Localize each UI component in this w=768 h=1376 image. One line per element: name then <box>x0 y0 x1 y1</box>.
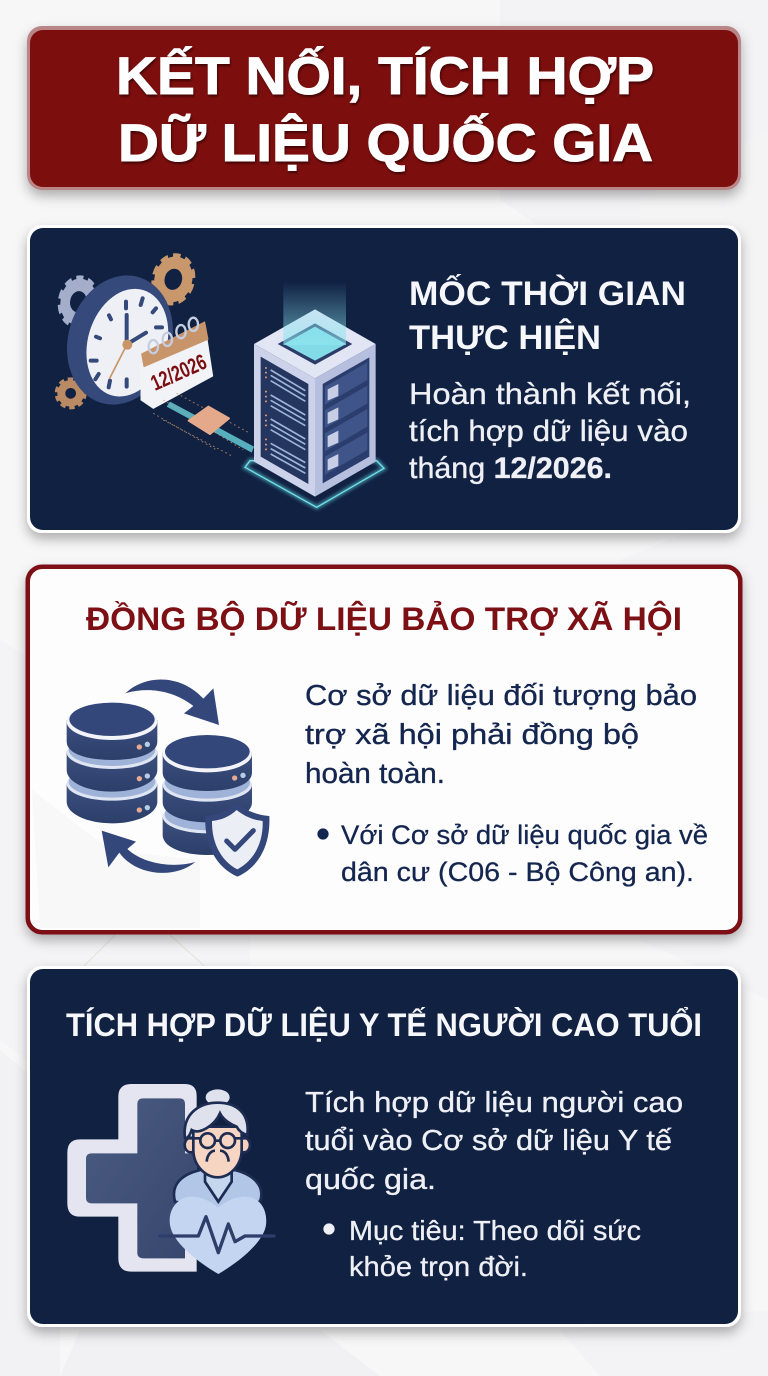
body text: timeline: tháng 12/2026. <box>409 452 612 485</box>
heart with pulse <box>160 1197 274 1274</box>
body text: social protection: trợ xã hội phải đồng bộ <box>305 719 639 751</box>
top arrow <box>125 680 219 725</box>
elderly woman <box>174 1089 261 1210</box>
icon: gears <box>56 252 198 407</box>
icon: clock <box>51 262 189 418</box>
body text: social protection: Cơ sở dữ liệu đối tượng bảo <box>305 680 697 712</box>
icon: shield <box>205 803 269 877</box>
bullet: social protection <box>318 820 708 887</box>
icon: calendar <box>141 318 213 408</box>
icon: syncing databases with shield <box>67 680 269 877</box>
body text: timeline <box>409 378 691 485</box>
body text: social protection: hoàn toàn. <box>305 758 445 790</box>
body text: social protection <box>305 680 697 790</box>
bullet: elderly health: khỏe trọn đời. <box>349 1251 528 1282</box>
illustration: clock, calendar and server <box>51 252 384 507</box>
panel: timeline <box>27 225 741 533</box>
icon: server <box>245 282 384 507</box>
heading: timeline <box>409 274 686 357</box>
panel: elderly health data <box>27 966 741 1327</box>
title text <box>116 46 654 173</box>
icon: medical cross, elderly woman and heart <box>67 1084 274 1274</box>
icon: calendar: 12/2026 <box>147 349 210 396</box>
title banner <box>27 26 741 190</box>
medical cross <box>67 1084 197 1272</box>
left database <box>67 703 157 823</box>
bullet: social protection: Với Cơ sở dữ liệu quốc gia về <box>341 820 708 850</box>
body text: elderly health: Tích hợp dữ liệu người cao <box>305 1087 683 1119</box>
heading: elderly health: TÍCH HỢP DỮ LIỆU Y TẾ NGƯỜI CAO TUỔI <box>66 1007 702 1043</box>
right database <box>163 735 252 855</box>
panel: social protection data <box>27 566 741 933</box>
heading: timeline: THỰC HIỆN <box>409 319 601 357</box>
bullet: elderly health <box>324 1215 641 1282</box>
title text: DỮ LIỆU QUỐC GIA <box>118 112 653 173</box>
body text: elderly health <box>305 1087 683 1196</box>
body text: timeline: tích hợp dữ liệu vào <box>409 415 688 448</box>
bottom arrow <box>102 831 195 873</box>
body text: elderly health: quốc gia. <box>305 1164 436 1196</box>
heading: timeline: MỐC THỜI GIAN <box>409 274 686 313</box>
bullet: social protection: dân cư (C06 - Bộ Công an). <box>341 857 694 887</box>
title text: KẾT NỐI, TÍCH HỢP <box>116 46 654 106</box>
body text: elderly health: tuổi vào Cơ sở dữ liệu Y tế <box>305 1125 672 1157</box>
heading: social protection: ĐỒNG BỘ DỮ LIỆU BẢO TRỢ XÃ HỘI <box>86 601 682 637</box>
connector chip <box>153 393 254 457</box>
body text: timeline: Hoàn thành kết nối, <box>409 378 691 411</box>
bullet: elderly health: Mục tiêu: Theo dõi sức <box>349 1215 641 1246</box>
